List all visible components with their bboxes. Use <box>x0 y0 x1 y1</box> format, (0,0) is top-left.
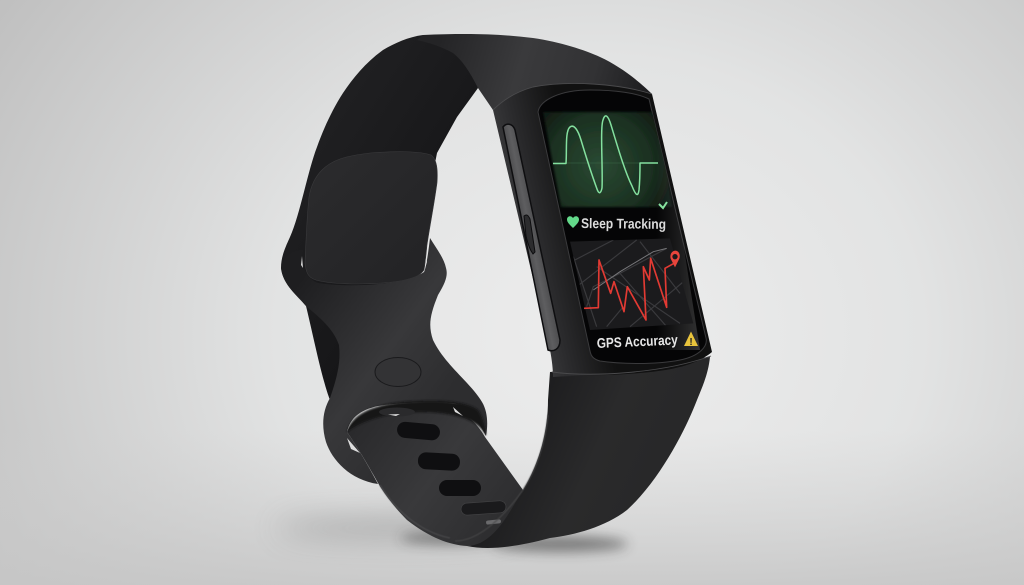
label: Sleep Tracking: Sleep Tracking <box>581 215 666 232</box>
warning icon: ! <box>689 337 693 348</box>
back strap inner surface <box>281 35 478 400</box>
adjustment holes <box>396 421 506 525</box>
lower band section <box>467 357 710 548</box>
strap gaps <box>301 256 463 453</box>
snap stud outline <box>375 358 421 386</box>
heart icon <box>567 216 579 228</box>
clasp pad <box>305 152 437 284</box>
warning icon <box>684 332 698 348</box>
side sensor strip <box>503 124 560 351</box>
side button <box>524 215 535 254</box>
lower band inner lip <box>455 415 548 541</box>
body seams <box>493 83 711 374</box>
label: GPS Accuracy: GPS Accuracy <box>596 331 678 351</box>
screen <box>538 90 706 364</box>
top strap outer surface <box>417 34 652 110</box>
strap tail with holes <box>347 404 545 546</box>
watch body <box>493 83 712 377</box>
center strap with keeper loop <box>281 238 487 484</box>
red signal line <box>584 258 674 320</box>
location pin <box>670 251 680 267</box>
check mark <box>659 202 667 208</box>
ground shadow <box>275 519 628 552</box>
graph: sleep tracking waveform <box>543 95 700 350</box>
fitness band <box>281 34 712 548</box>
keeper inner shadow <box>347 401 486 436</box>
map chart: GPS accuracy <box>570 238 693 330</box>
keeper stud <box>379 408 415 416</box>
